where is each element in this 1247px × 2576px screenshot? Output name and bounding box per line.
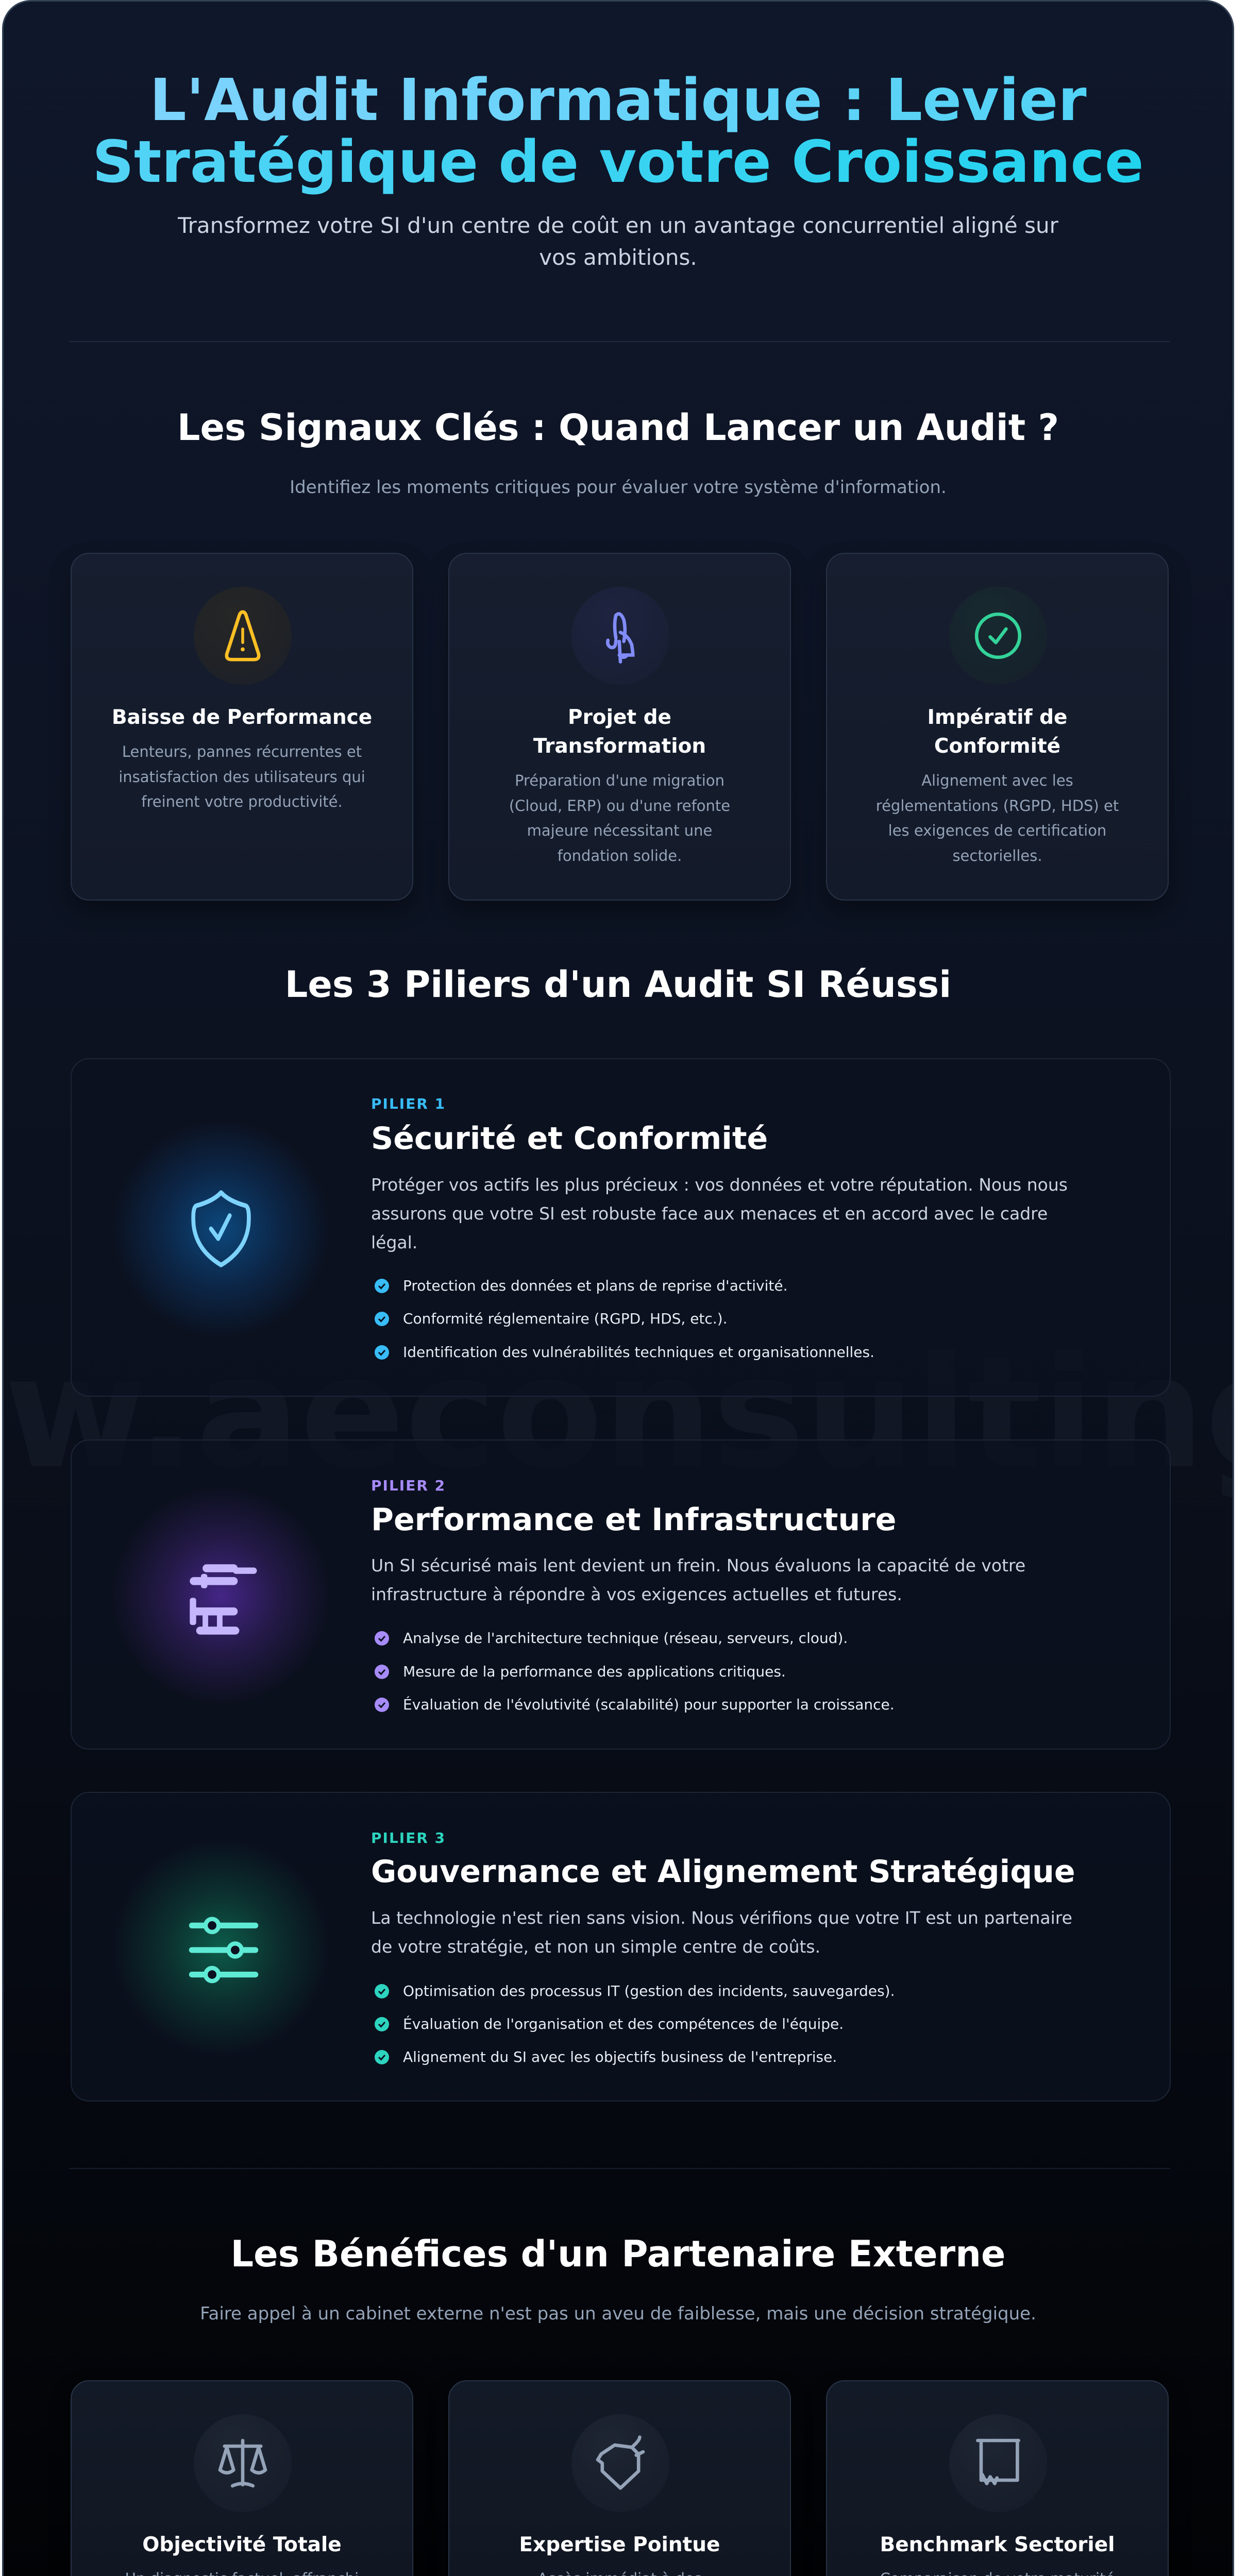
bullet list (375, 1277, 874, 1361)
card text: Préparation d'une migration (515, 772, 724, 789)
panel: pilier 2: Mesure de la performance des applications critiques. (403, 1663, 786, 1680)
panel: pilier 3: Évaluation de l'organisation et des compétences de l'équipe. (403, 2015, 844, 2032)
card text: les exigences de certification (888, 822, 1106, 839)
pillar text: de votre stratégie, et non un simple centre de coûts. (371, 1937, 820, 1957)
card title: Transformation (533, 735, 706, 758)
card: baisse de performance (71, 553, 413, 901)
pillar text: Protéger vos actifs les plus précieux : vos données et votre réputation. Nous nous (371, 1175, 1068, 1195)
card text: Alignement avec les (921, 772, 1073, 789)
subheading: bénéfices: Faire appel à un cabinet externe n'est pas un aveu de faiblesse, mais une décision stratégique. (200, 2303, 1036, 2324)
card: expertise (448, 2380, 791, 2576)
panel: pilier 3: Optimisation des processus IT (gestion des incidents, sauvegardes). (403, 1982, 895, 1999)
title: Stratégique de votre Croissance (92, 129, 1144, 196)
title: L'Audit Informatique : Levier (149, 67, 1087, 134)
icon: sliders glow (108, 1834, 334, 2061)
card text: sectorielles. (952, 847, 1042, 865)
subtitle: vos ambitions. (539, 245, 697, 270)
icon: warning (194, 587, 292, 685)
panel: pilier 3: Alignement du SI avec les objectifs business de l'entreprise. (403, 2048, 837, 2065)
subtitle: Transformez votre SI d'un centre de coût en un avantage concurrentiel aligné sur (178, 213, 1058, 238)
icon: shield glow (108, 1115, 334, 1342)
panel: pilier 2 (71, 1439, 1171, 1750)
panel: pilier 1: Conformité réglementaire (RGPD, HDS, etc.). (403, 1310, 728, 1327)
panel: pilier 2: Analyse de l'architecture technique (réseau, serveurs, cloud). (403, 1630, 848, 1647)
card text (509, 772, 730, 865)
card text: freinent votre productivité. (141, 793, 343, 810)
card text: insatisfaction des utilisateurs qui (119, 768, 365, 785)
pillar text (371, 1908, 1072, 1957)
card text (876, 772, 1119, 865)
bullet list (375, 1982, 895, 2065)
panel: pilier 2: Évaluation de l'évolutivité (scalabilité) pour supporter la croissance. (403, 1696, 895, 1713)
card text: Lenteurs, pannes récurrentes et (122, 743, 362, 760)
icon: check circle (949, 587, 1047, 685)
card: objectivité (71, 2380, 413, 2576)
panel: pilier 1 (71, 1058, 1171, 1397)
card title: Conformité (934, 735, 1060, 758)
card: impératif de conformité (826, 553, 1169, 901)
bullet list (375, 1630, 895, 1713)
heading: piliers: Les 3 Piliers d'un Audit SI Réussi (285, 963, 951, 1006)
pillar text: Un SI sécurisé mais lent devient un frein. Nous évaluons la capacité de votre (371, 1555, 1025, 1575)
label: PILIER 1 (371, 1095, 446, 1112)
card title: Expertise Pointue (519, 2533, 720, 2556)
pillar text: infrastructure à répondre à vos exigences actuelles et futures. (371, 1584, 902, 1604)
card: benchmark (826, 2380, 1169, 2576)
panel: pilier 1: Protection des données et plans de reprise d'activité. (403, 1277, 787, 1294)
pillar text (371, 1555, 1025, 1604)
pillar title: Performance et Infrastructure (371, 1502, 896, 1538)
panel: pilier 3 (71, 1792, 1171, 2102)
card: projet de transformation (448, 553, 791, 901)
heading: signaux: Les Signaux Clés : Quand Lancer un Audit ? (177, 406, 1059, 449)
card title: Baisse de Performance (112, 706, 372, 729)
card title: Impératif de (928, 706, 1068, 729)
card text: (Cloud, ERP) ou d'une refonte (509, 796, 730, 814)
panel: pilier 1: Identification des vulnérabilités techniques et organisationnelles. (403, 1344, 874, 1361)
card title (928, 706, 1068, 758)
pillar text (371, 1175, 1068, 1252)
card text: majeure nécessitant une (527, 822, 712, 839)
card title: Objectivité Totale (142, 2533, 342, 2556)
heading: bénéfices: Les Bénéfices d'un Partenaire Externe (230, 2233, 1006, 2275)
icon: presentation board (949, 2414, 1047, 2512)
pillar text: légal. (371, 1232, 417, 1252)
pillar title: Sécurité et Conformité (371, 1121, 768, 1157)
card title (533, 706, 706, 758)
card text: fondation solide. (558, 847, 682, 865)
title (92, 67, 1144, 196)
icon: infrastructure glow (108, 1482, 334, 1709)
card text (119, 743, 365, 810)
card text: réglementations (RGPD, HDS) et (876, 796, 1119, 814)
label: PILIER 2 (371, 1477, 446, 1494)
card title: Benchmark Sectoriel (880, 2533, 1115, 2556)
icon: scale (194, 2414, 292, 2512)
pillar title: Gouvernance et Alignement Stratégique (371, 1854, 1075, 1890)
pillar text: assurons que votre SI est robuste face aux menaces et en accord avec le cadre (371, 1204, 1048, 1224)
pillar text: La technologie n'est rien sans vision. Nous vérifions que votre IT est un partenaire (371, 1908, 1072, 1928)
subtitle (178, 213, 1058, 270)
icon: hexagon (571, 2414, 669, 2512)
card title: Projet de (568, 706, 671, 729)
subheading: signaux: Identifiez les moments critiques pour évaluer votre système d'information. (290, 477, 947, 498)
icon: transformation (571, 587, 669, 685)
label: PILIER 3 (371, 1829, 446, 1846)
